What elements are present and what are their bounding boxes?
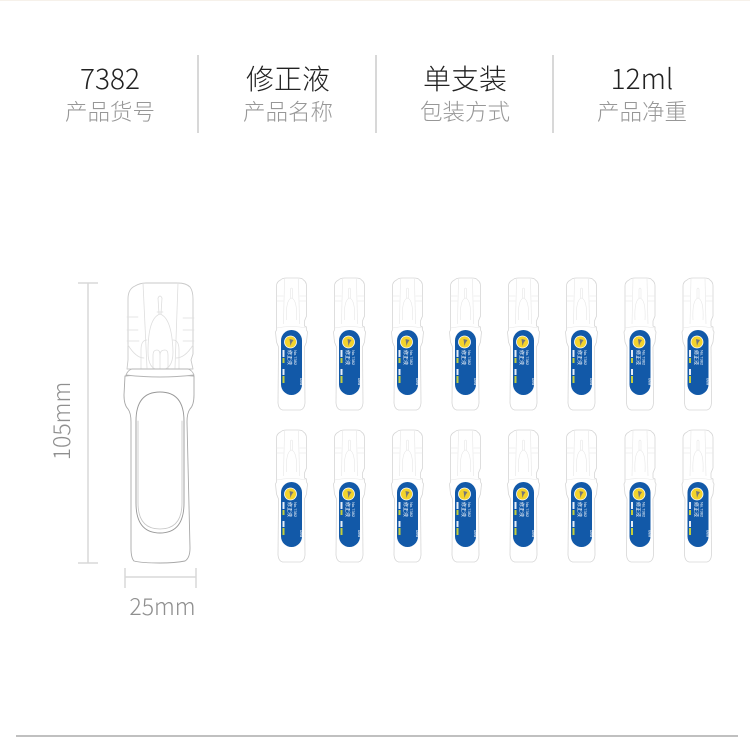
spec: product number: 产品货号: [65, 95, 155, 127]
spec: product name: 修正液: [246, 58, 330, 98]
product box grid: 16 bottles: [276, 278, 714, 562]
cap details: [127, 283, 194, 370]
spec: product name: 产品名称: [243, 95, 333, 127]
spec: product name: [243, 58, 333, 127]
top edge line: [0, 0, 750, 1]
large product outline drawing: [124, 283, 194, 563]
height label: 105mm: [43, 382, 77, 460]
collar: [126, 369, 194, 377]
spec: net weight: 12ml: [611, 58, 673, 98]
row 1: [276, 278, 714, 410]
spec: packaging: 单支装: [423, 58, 507, 98]
spec: product number: [65, 58, 155, 127]
body outline: [124, 374, 194, 563]
width dimension line: [125, 568, 196, 588]
width label: 25mm: [129, 588, 196, 622]
spec: packaging: [420, 58, 510, 127]
spec: net weight: [597, 58, 687, 127]
spec: net weight: 产品净重: [597, 95, 687, 127]
height dimension line: [78, 283, 98, 563]
cap outline: [127, 283, 193, 369]
label window: [136, 392, 184, 533]
spec: packaging: 包装方式: [420, 95, 510, 127]
row 2: [276, 430, 714, 562]
spec: product number: 7382: [80, 58, 140, 98]
bottom divider: [16, 735, 738, 737]
